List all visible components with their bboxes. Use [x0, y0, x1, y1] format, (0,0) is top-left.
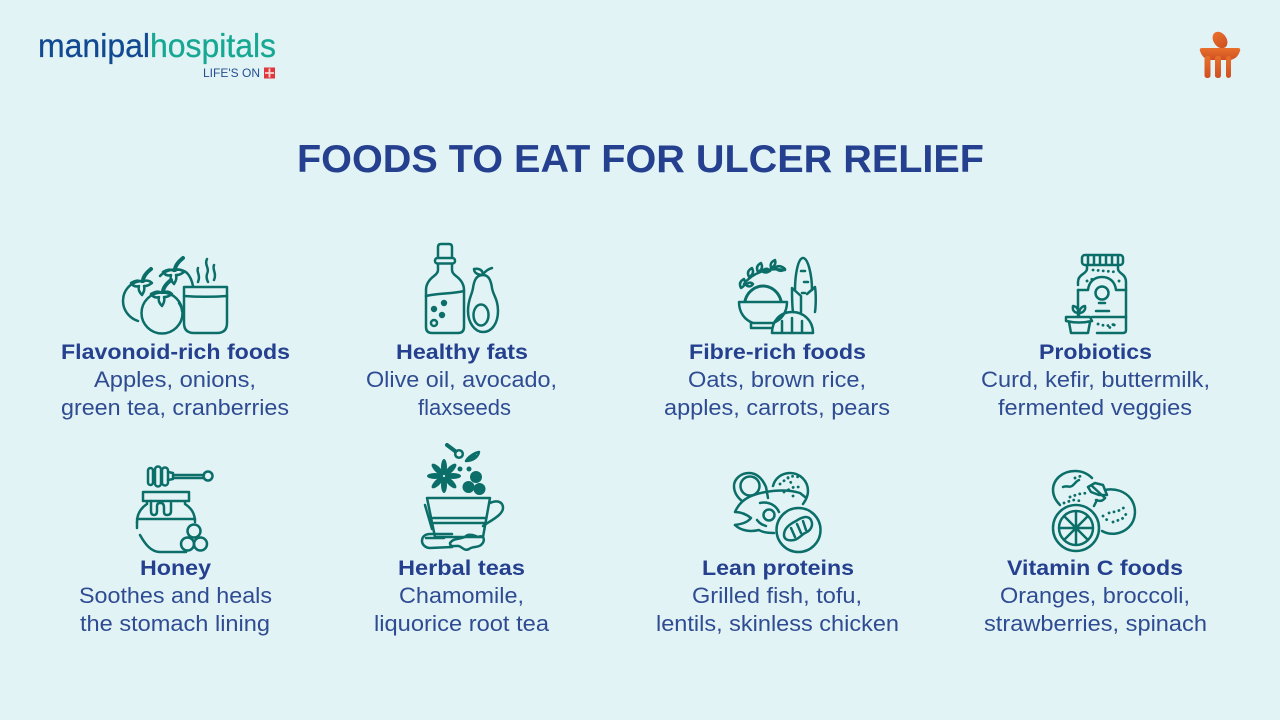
panel: probiotics — [981, 255, 1210, 420]
heading: vitamin C foods: Vitamin C foods — [1007, 556, 1183, 580]
panel: fibre-rich foods — [664, 258, 890, 420]
text: honey description — [79, 583, 272, 636]
logo: Manipal Hospitals — [38, 28, 276, 80]
heading: honey: Honey — [140, 556, 211, 580]
icon: rice bowl, wheat and bread — [739, 258, 816, 333]
panel: healthy fats — [366, 244, 557, 420]
heading: herbal teas: Herbal teas — [398, 556, 525, 580]
text: honey description: Soothes and heals — [79, 583, 272, 608]
icon: tea cup with spices — [422, 445, 503, 550]
text: vitamin C examples: strawberries, spinach — [984, 611, 1207, 636]
icon: citrus fruits — [1053, 471, 1135, 551]
icon: probiotic jar and pot — [1066, 255, 1126, 333]
text: lean proteins examples: lentils, skinless chicken — [656, 611, 899, 636]
title: FOODS TO EAT FOR ULCER RELIEF — [297, 138, 984, 181]
logo: Manipal Hospitals: LIFE'S ON — [203, 66, 260, 80]
icon: tomatoes and cup — [123, 258, 227, 334]
icon: star anise and spice dots — [427, 459, 486, 495]
panel: flavonoid-rich foods — [61, 258, 290, 420]
logo: orange emblem — [1200, 29, 1240, 78]
text: lean proteins examples — [656, 583, 899, 636]
panel: lean proteins — [656, 473, 899, 636]
text: vitamin C examples — [984, 583, 1207, 636]
text: probiotics examples: Curd, kefir, buttermilk, — [981, 367, 1210, 392]
icon: honey pot and dipper — [137, 466, 212, 552]
text: herbal teas examples — [374, 583, 550, 636]
panel: herbal teas — [374, 445, 550, 636]
heading: healthy fats: Healthy fats — [396, 340, 528, 364]
panel: honey — [79, 466, 272, 636]
text: herbal teas examples: liquorice root tea — [374, 611, 550, 636]
text: flavonoid examples: Apples, onions, — [94, 367, 256, 392]
panel: vitamin C foods — [984, 471, 1207, 636]
text: healthy fats examples — [366, 367, 557, 420]
icon: fish, tofu and steak — [734, 473, 820, 552]
text: vitamin C examples: Oranges, broccoli, — [1000, 583, 1190, 608]
text: fibre-rich examples — [664, 367, 890, 420]
text: probiotics examples — [981, 367, 1210, 420]
text: honey description: the stomach lining — [80, 611, 270, 636]
text: healthy fats examples: Olive oil, avocado, — [366, 367, 557, 392]
heading: flavonoid-rich foods: Flavonoid-rich foods — [61, 340, 290, 364]
logo: Manipal Hospitals: hospitals — [150, 28, 276, 65]
heading: probiotics: Probiotics — [1039, 340, 1152, 364]
text: probiotics examples: fermented veggies — [998, 395, 1192, 420]
text: flavonoid examples — [61, 367, 289, 420]
text: herbal teas examples: Chamomile, — [399, 583, 524, 608]
heading: lean proteins: Lean proteins — [702, 556, 854, 580]
logo: Manipal Hospitals: manipal — [38, 28, 150, 65]
text: healthy fats examples: flaxseeds — [418, 395, 511, 420]
text: fibre-rich examples: apples, carrots, pears — [664, 395, 890, 420]
heading: fibre-rich foods: Fibre-rich foods — [689, 340, 866, 364]
text: lean proteins examples: Grilled fish, tofu, — [692, 583, 862, 608]
text: flavonoid examples: green tea, cranberries — [61, 395, 289, 420]
text: fibre-rich examples: Oats, brown rice, — [688, 367, 866, 392]
icon: oil bottle and avocado — [426, 244, 498, 333]
